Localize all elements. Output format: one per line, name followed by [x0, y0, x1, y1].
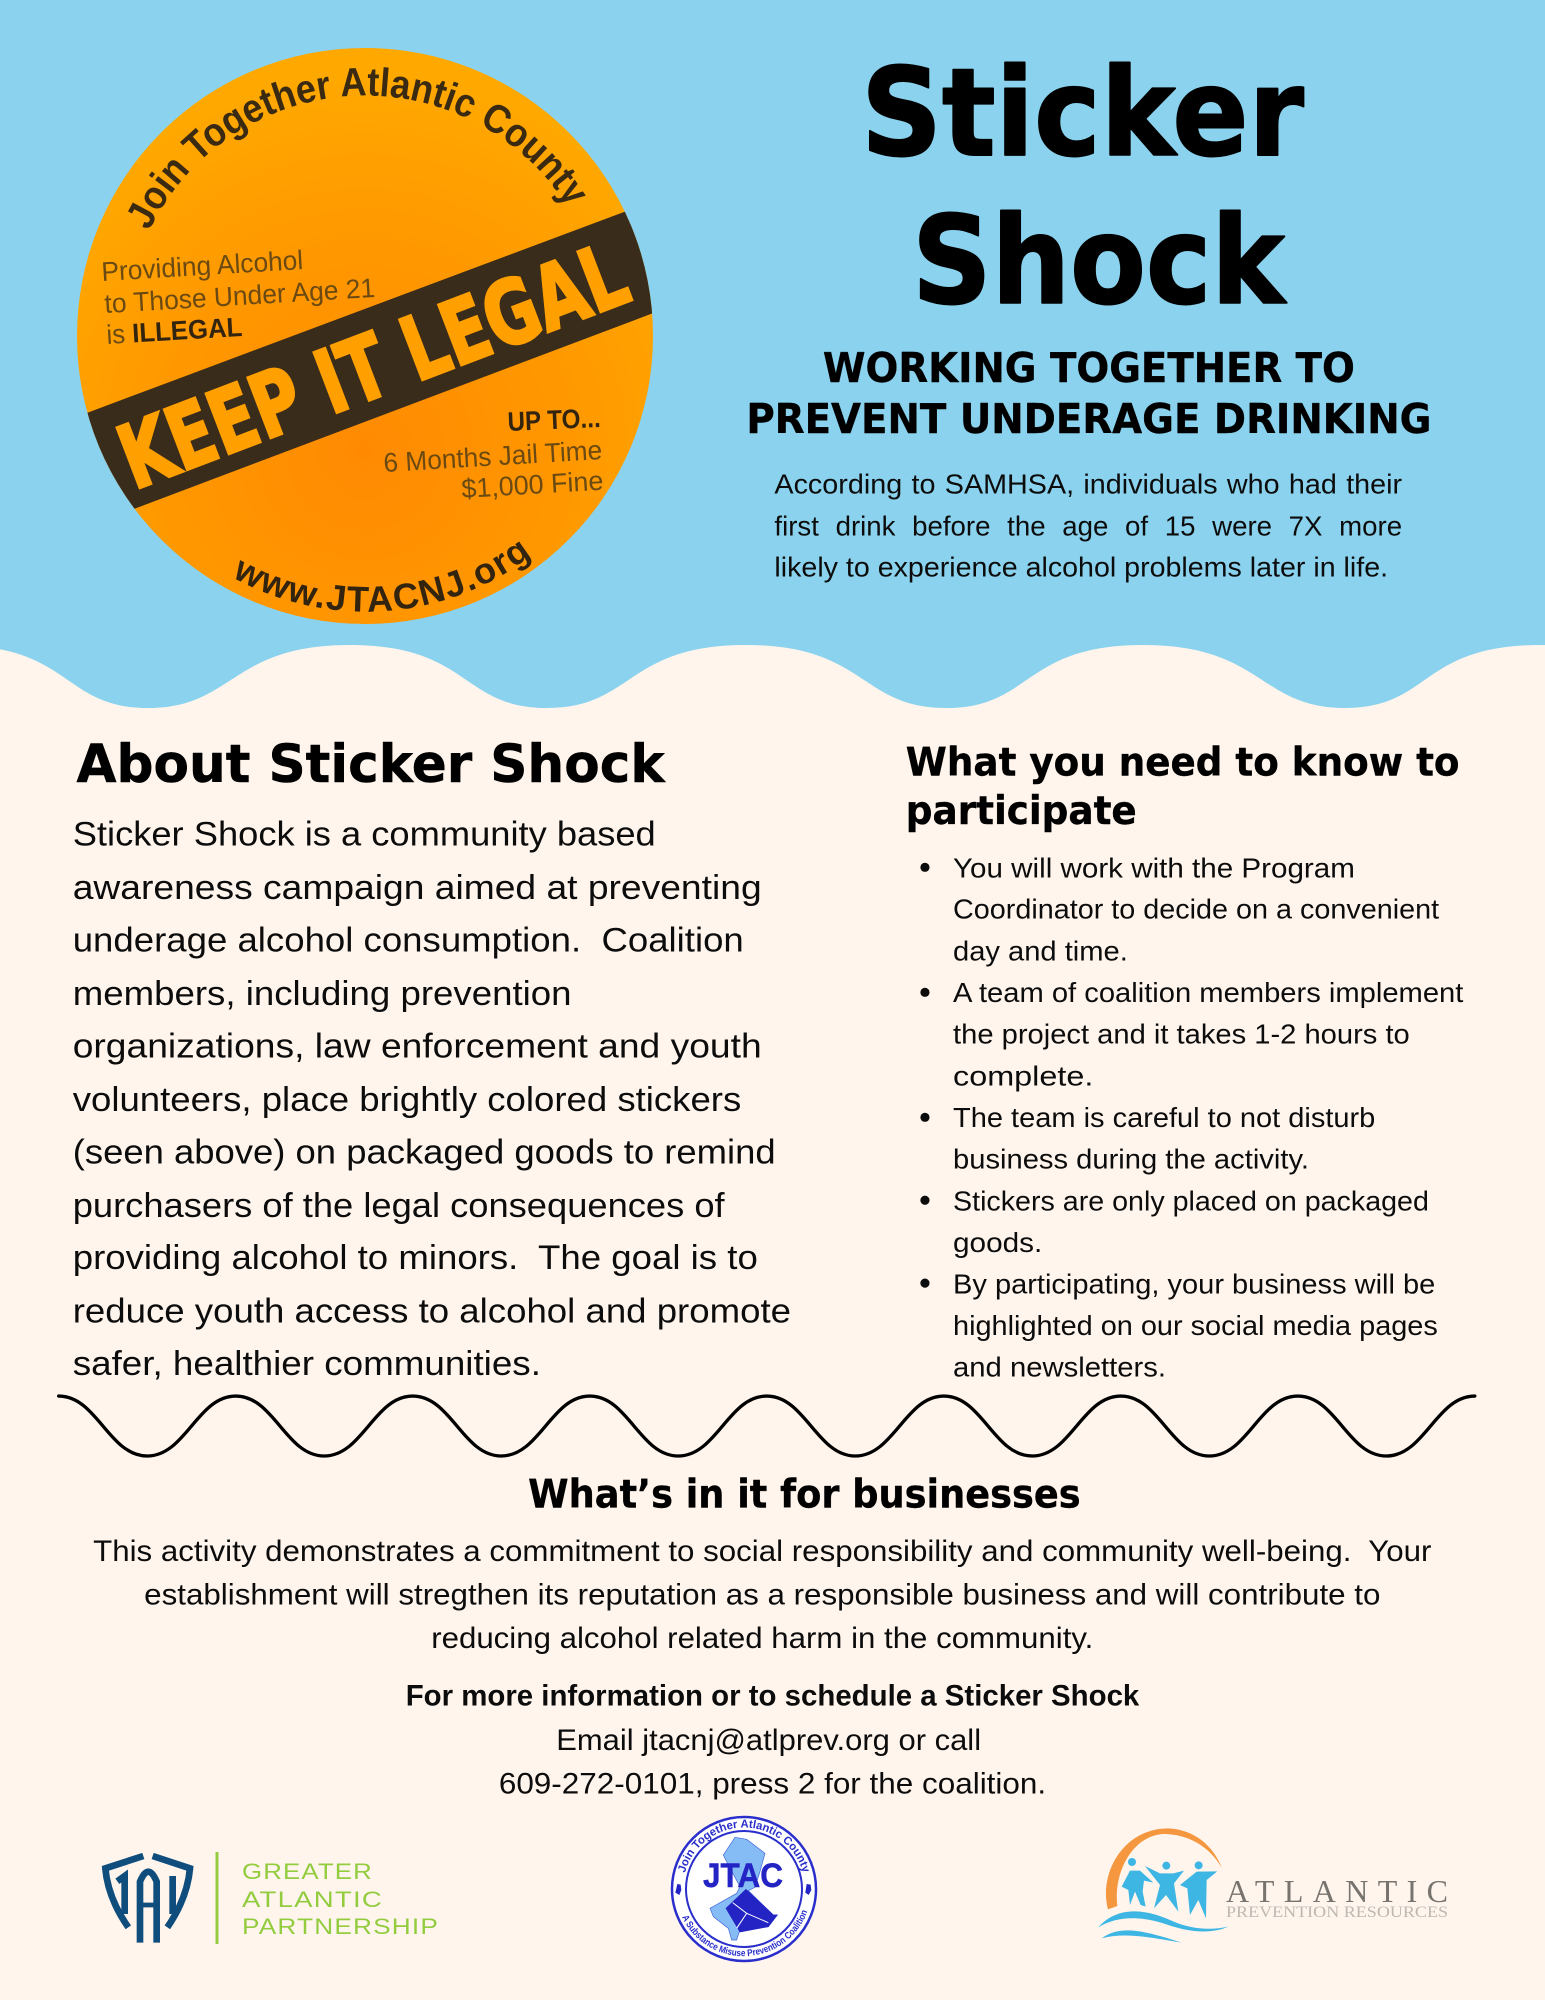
participation bullet list: complete. [953, 1060, 1093, 1091]
intro text: SAMHSA statistic: first drink before the age of 15 were 7X more [774, 511, 1402, 542]
about paragraph: awareness campaign aimed at preventing [73, 869, 762, 907]
participation bullet list: day and time. [953, 935, 1128, 966]
businesses paragraph: This activity demonstrates a commitment to social responsibility and community well-being. Your [93, 1535, 1432, 1568]
about paragraph [73, 816, 791, 1383]
subtitle: PREVENT UNDERAGE DRINKING [746, 395, 1431, 443]
wordmark [242, 1859, 439, 1939]
ring text: Join Together Atlantic County [678, 1820, 809, 1872]
squiggle divider [59, 1396, 1475, 1456]
participation bullet list: goods. [953, 1227, 1042, 1258]
logo: JTAC seal: A Substance Misuse Prevention Coalition [682, 1910, 808, 1956]
about paragraph: reduce youth access to alcohol and promote [73, 1293, 791, 1331]
wordmark: ATLANTIC [1226, 1873, 1448, 1909]
participation bullet list: business during the activity. [953, 1143, 1309, 1174]
participation bullet list [920, 853, 1464, 1382]
title [861, 43, 1304, 332]
icon: shield [105, 1856, 190, 1943]
participation bullet list: Stickers are only placed on packaged [953, 1185, 1429, 1216]
heading: what you need to know [906, 740, 1460, 834]
participation bullet list: A team of coalition members implement [953, 977, 1464, 1008]
contact block [406, 1679, 1140, 1800]
intro text: SAMHSA statistic: According to SAMHSA, individuals who had their [774, 469, 1402, 500]
about paragraph: (seen above) on packaged goods to remind [73, 1133, 776, 1171]
sticker left text: is ILLEGAL [106, 312, 243, 350]
title: Sticker [861, 43, 1304, 184]
participation bullet list: You will work with the Program [953, 853, 1355, 884]
wordmark: PREVENTION RESOURCES [1226, 1904, 1448, 1921]
about paragraph: safer, healthier communities. [73, 1345, 541, 1383]
about paragraph: providing alcohol to minors. The goal is to [73, 1239, 758, 1277]
heading: what you need to know: What you need to know to [906, 740, 1460, 786]
logo: atlantic prevention resources [1098, 1828, 1448, 1943]
icon: new jersey map [675, 1837, 811, 1940]
about paragraph: underage alcohol consumption. Coalition [73, 922, 744, 960]
band text: KEEP IT LEGAL [105, 223, 641, 510]
title: Shock [912, 191, 1287, 332]
sticker image: keep it legal [77, 48, 653, 624]
JTAC letters: JTAC [703, 1857, 783, 1895]
arc text top: Join Together Atlantic County [128, 67, 586, 228]
sticker right text [383, 403, 604, 504]
about paragraph: volunteers, place brightly colored stickers [73, 1081, 741, 1119]
participation bullet list: the project and it takes 1-2 hours to [953, 1018, 1410, 1049]
participation bullet list: Coordinator to decide on a convenient [953, 893, 1439, 924]
participation bullet list: The team is careful to not disturb [953, 1102, 1375, 1133]
dark diagonal band [88, 212, 652, 509]
arc text bottom: www.JTACNJ.org [236, 542, 532, 612]
logo: greater atlantic partnership [105, 1852, 439, 1944]
about paragraph: Sticker Shock is a community based [73, 816, 656, 854]
intro text: SAMHSA statistic: likely to experience alcohol problems later in life. [774, 552, 1388, 583]
sticker right text: 6 Months Jail Time [383, 435, 603, 478]
icon: sun arc, people and waves [1098, 1828, 1228, 1943]
about paragraph: members, including prevention [73, 975, 572, 1013]
wordmark: GREATER [242, 1859, 373, 1884]
subtitle: WORKING TOGETHER TO [823, 344, 1355, 392]
businesses paragraph [93, 1535, 1432, 1655]
heading: about sticker shock: About Sticker Shock [77, 734, 666, 795]
sticker left text: Providing Alcohol [101, 245, 304, 287]
intro text: SAMHSA statistic [774, 469, 1402, 583]
participation bullet list: and newsletters. [953, 1351, 1166, 1382]
about paragraph: purchasers of the legal consequences of [73, 1187, 725, 1225]
contact block: Email jtacnj@atlprev.org or call [556, 1724, 981, 1757]
about paragraph: organizations, law enforcement and youth [73, 1027, 762, 1065]
header background [0, 0, 1545, 720]
sticker right text: UP TO... [507, 403, 601, 437]
heading: what's in it for businesses: What’s in it for businesses [528, 1472, 1081, 1518]
contact block: For more information or to schedule a Sticker Shock [406, 1679, 1140, 1712]
heading: what you need to know: participate [906, 788, 1137, 834]
subtitle [746, 344, 1431, 443]
businesses paragraph: reducing alcohol related harm in the community. [431, 1622, 1093, 1655]
wordmark: ATLANTIC [242, 1887, 383, 1912]
cream page body with wavy top edge [0, 645, 1545, 2000]
participation bullet list: By participating, your business will be [953, 1268, 1435, 1299]
businesses paragraph: establishment will stregthen its reputation as a responsible business and will contribute to [144, 1579, 1380, 1612]
sticker left text [101, 245, 376, 350]
sticker right text: $1,000 Fine [461, 466, 604, 504]
wordmark: PARTNERSHIP [242, 1914, 439, 1939]
participation bullet list: highlighted on our social media pages [953, 1310, 1438, 1341]
sticker left text: to Those Under Age 21 [104, 273, 376, 319]
logo: JTAC seal [670, 1816, 818, 1962]
contact block: 609-272-0101, press 2 for the coalition. [499, 1767, 1046, 1800]
